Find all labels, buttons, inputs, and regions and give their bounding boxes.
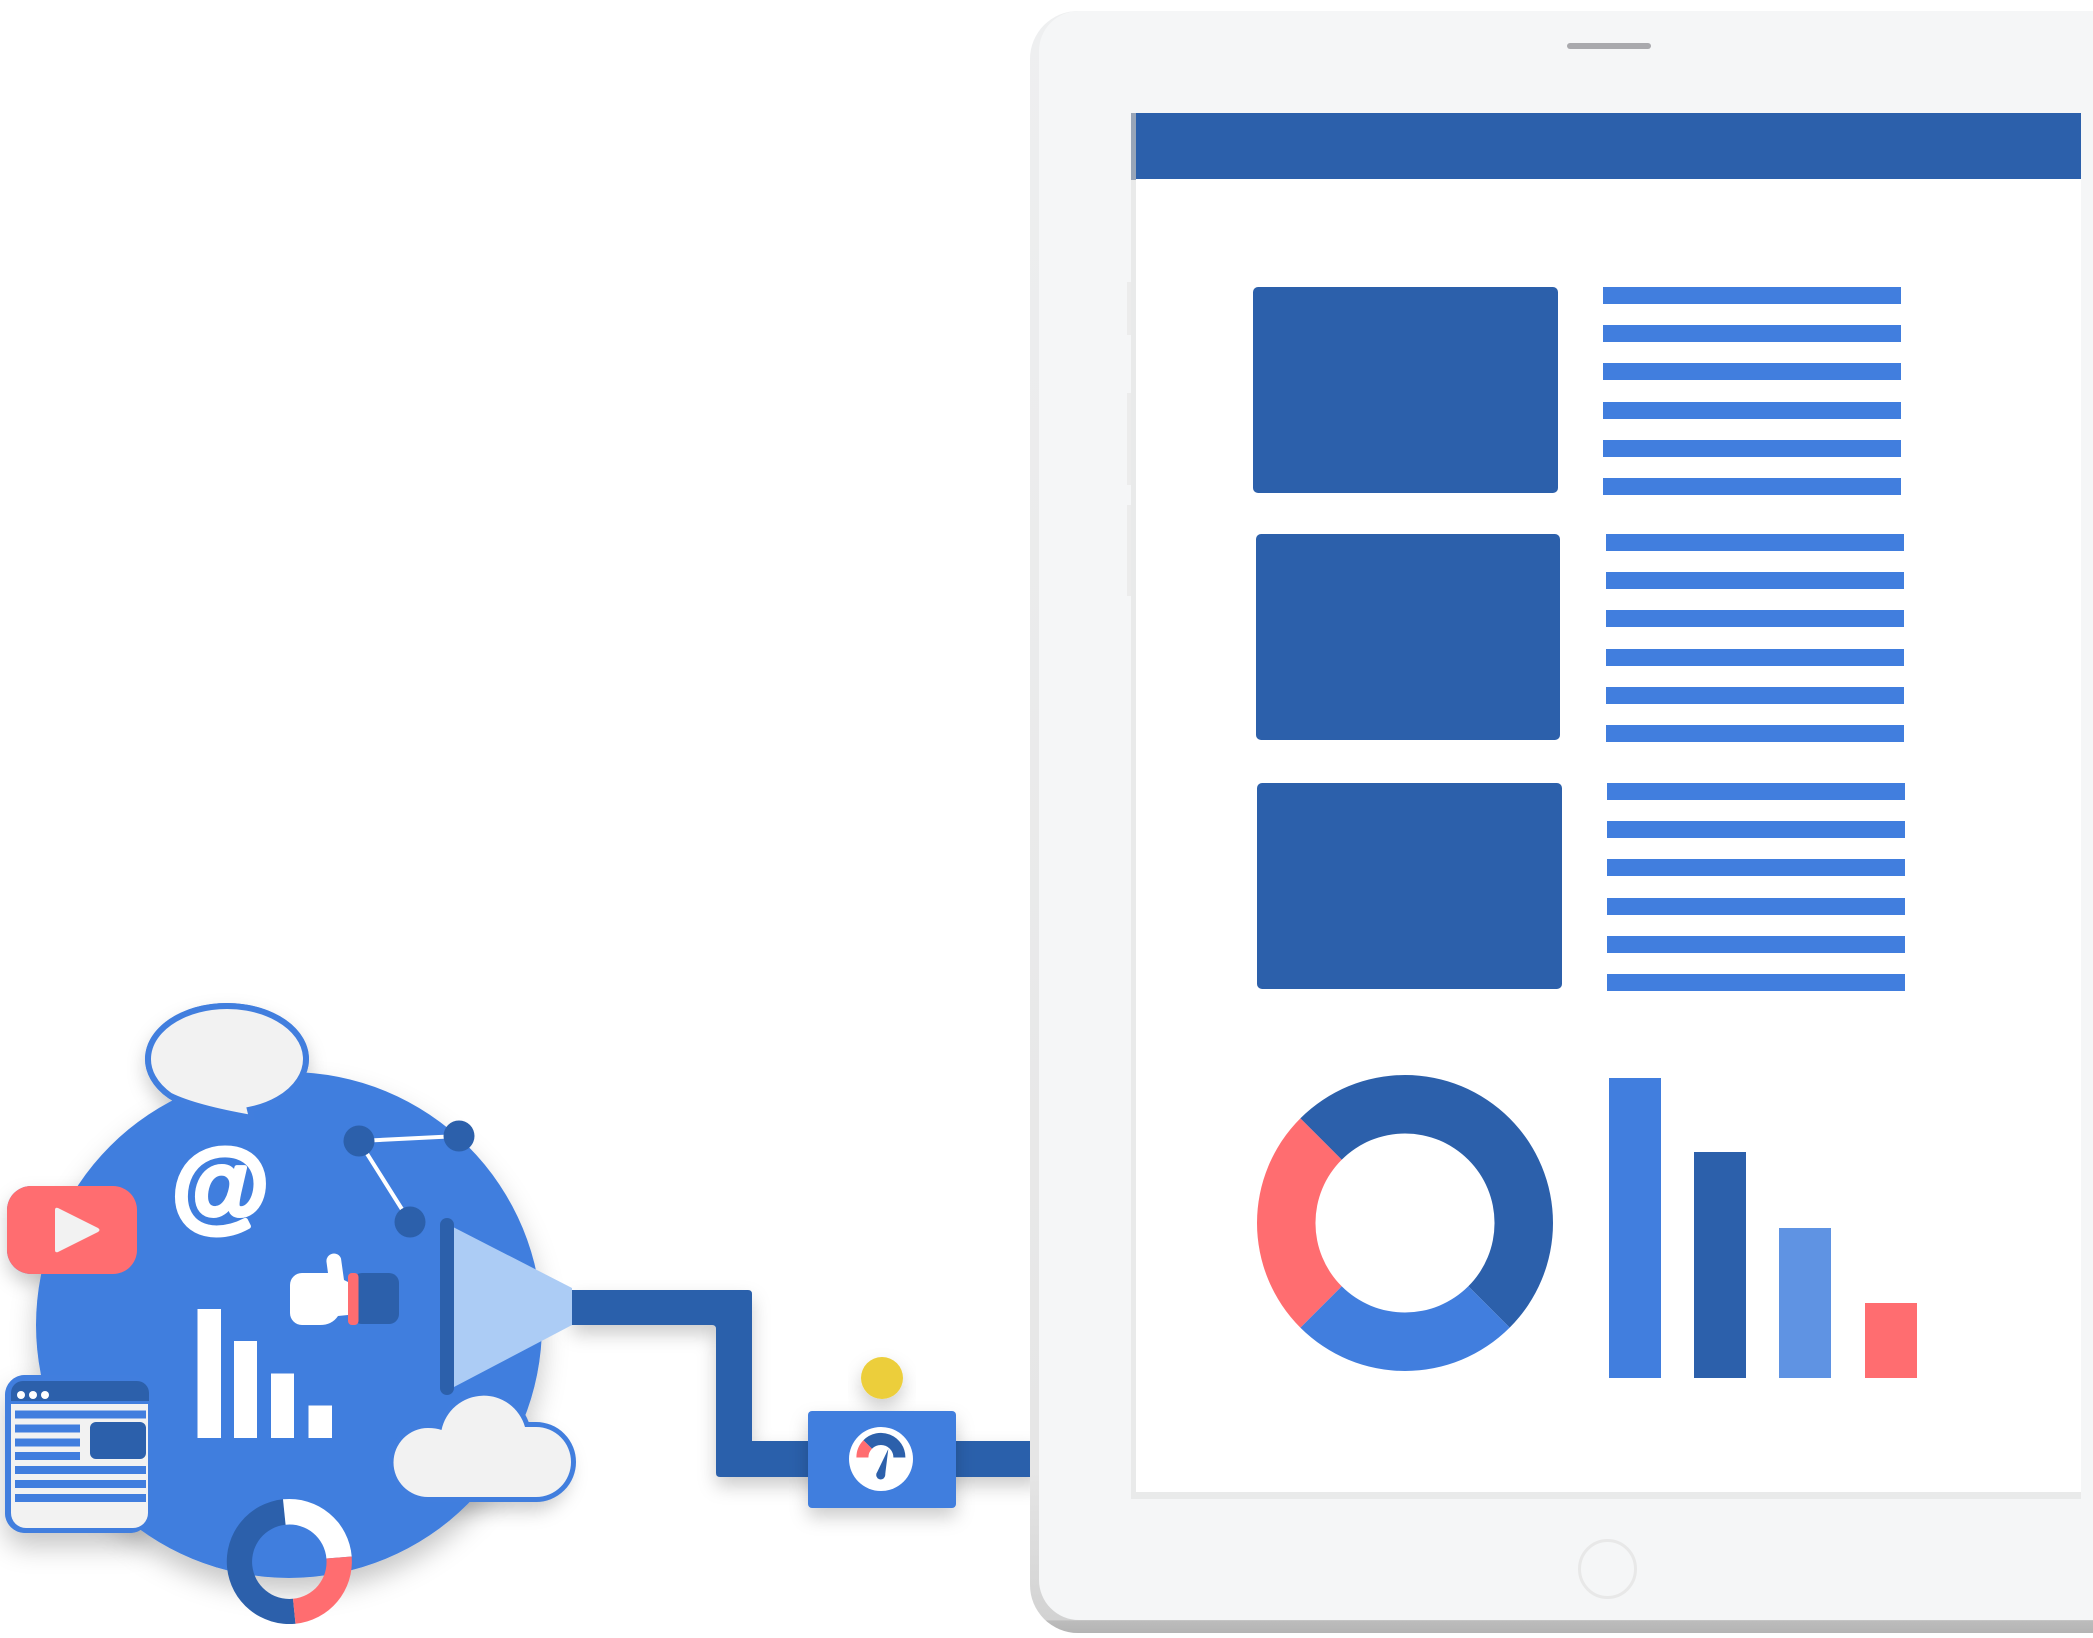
tablet home button — [1580, 1540, 1636, 1598]
tablet speaker — [1567, 43, 1651, 49]
icon: browser window — [5, 1375, 150, 1533]
tablet screen — [1131, 113, 2081, 1499]
box — [808, 1411, 956, 1508]
icon: at sign: @ — [172, 1129, 269, 1241]
icon: white bar chart — [198, 1309, 332, 1438]
tablet body — [1030, 11, 2093, 1633]
soft shadows of the floating icons — [5, 1003, 570, 1533]
tablet device — [1030, 11, 2093, 1633]
image block 2 — [1256, 534, 1560, 740]
small donut chart — [227, 1499, 352, 1624]
donut chart — [1257, 1075, 1553, 1371]
icon: speech bubble — [148, 1006, 306, 1118]
icon: thumbs up — [290, 1254, 399, 1325]
yellow indicator dot — [861, 1357, 903, 1399]
tablet side buttons — [1127, 282, 1136, 596]
browser dots — [17, 1391, 49, 1399]
screen header bar — [1136, 113, 2081, 179]
icon: megaphone — [440, 1218, 572, 1395]
browser content lines — [15, 1410, 146, 1502]
text lines 1 — [1603, 287, 1901, 495]
text lines 3 — [1607, 783, 1905, 991]
image block 1 — [1253, 287, 1558, 493]
image block 3 — [1257, 783, 1562, 989]
icon: video play button — [7, 1186, 137, 1274]
text lines 2 — [1606, 534, 1904, 742]
icon: speedometer — [849, 1427, 913, 1491]
gauge box — [808, 1357, 956, 1508]
browser image — [90, 1422, 146, 1459]
icon: network nodes — [344, 1120, 474, 1238]
connector pipe — [572, 1290, 1040, 1477]
bar chart — [1609, 1078, 1917, 1378]
icon: cloud — [394, 1396, 571, 1497]
big blue circle — [36, 1072, 542, 1578]
